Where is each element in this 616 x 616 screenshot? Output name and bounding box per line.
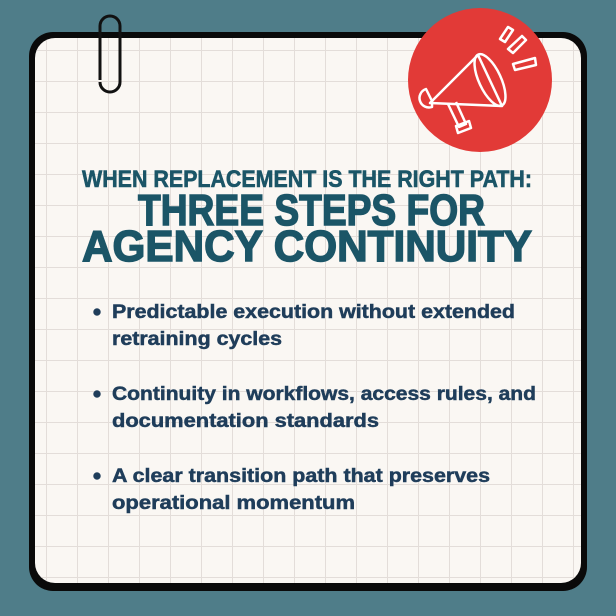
title: main heading (82, 186, 532, 271)
text block: bullet 3: A clear transition path that preserves (112, 466, 490, 487)
text block: bullet 1: Predictable execution without extended (112, 302, 515, 323)
text block: bullet 2: Continuity in workflows, access rules, and (112, 384, 536, 405)
text block: bullet 1 (94, 302, 515, 350)
title: subheading: WHEN REPLACEMENT IS THE RIGHT PATH: (82, 166, 532, 193)
icon: paperclip (100, 16, 120, 92)
title: main heading: AGENCY CONTINUITY (82, 222, 532, 271)
icon: megaphone in red circle (408, 8, 552, 152)
text block: bullet 3: operational momentum (112, 493, 355, 514)
text block: bullet 3 (94, 466, 490, 514)
title: main heading: THREE STEPS FOR (138, 186, 485, 235)
text block: bullet 2: documentation standards (112, 411, 379, 432)
text block: bullet 2 (94, 384, 536, 432)
text block: bullet 1: retraining cycles (112, 329, 282, 350)
